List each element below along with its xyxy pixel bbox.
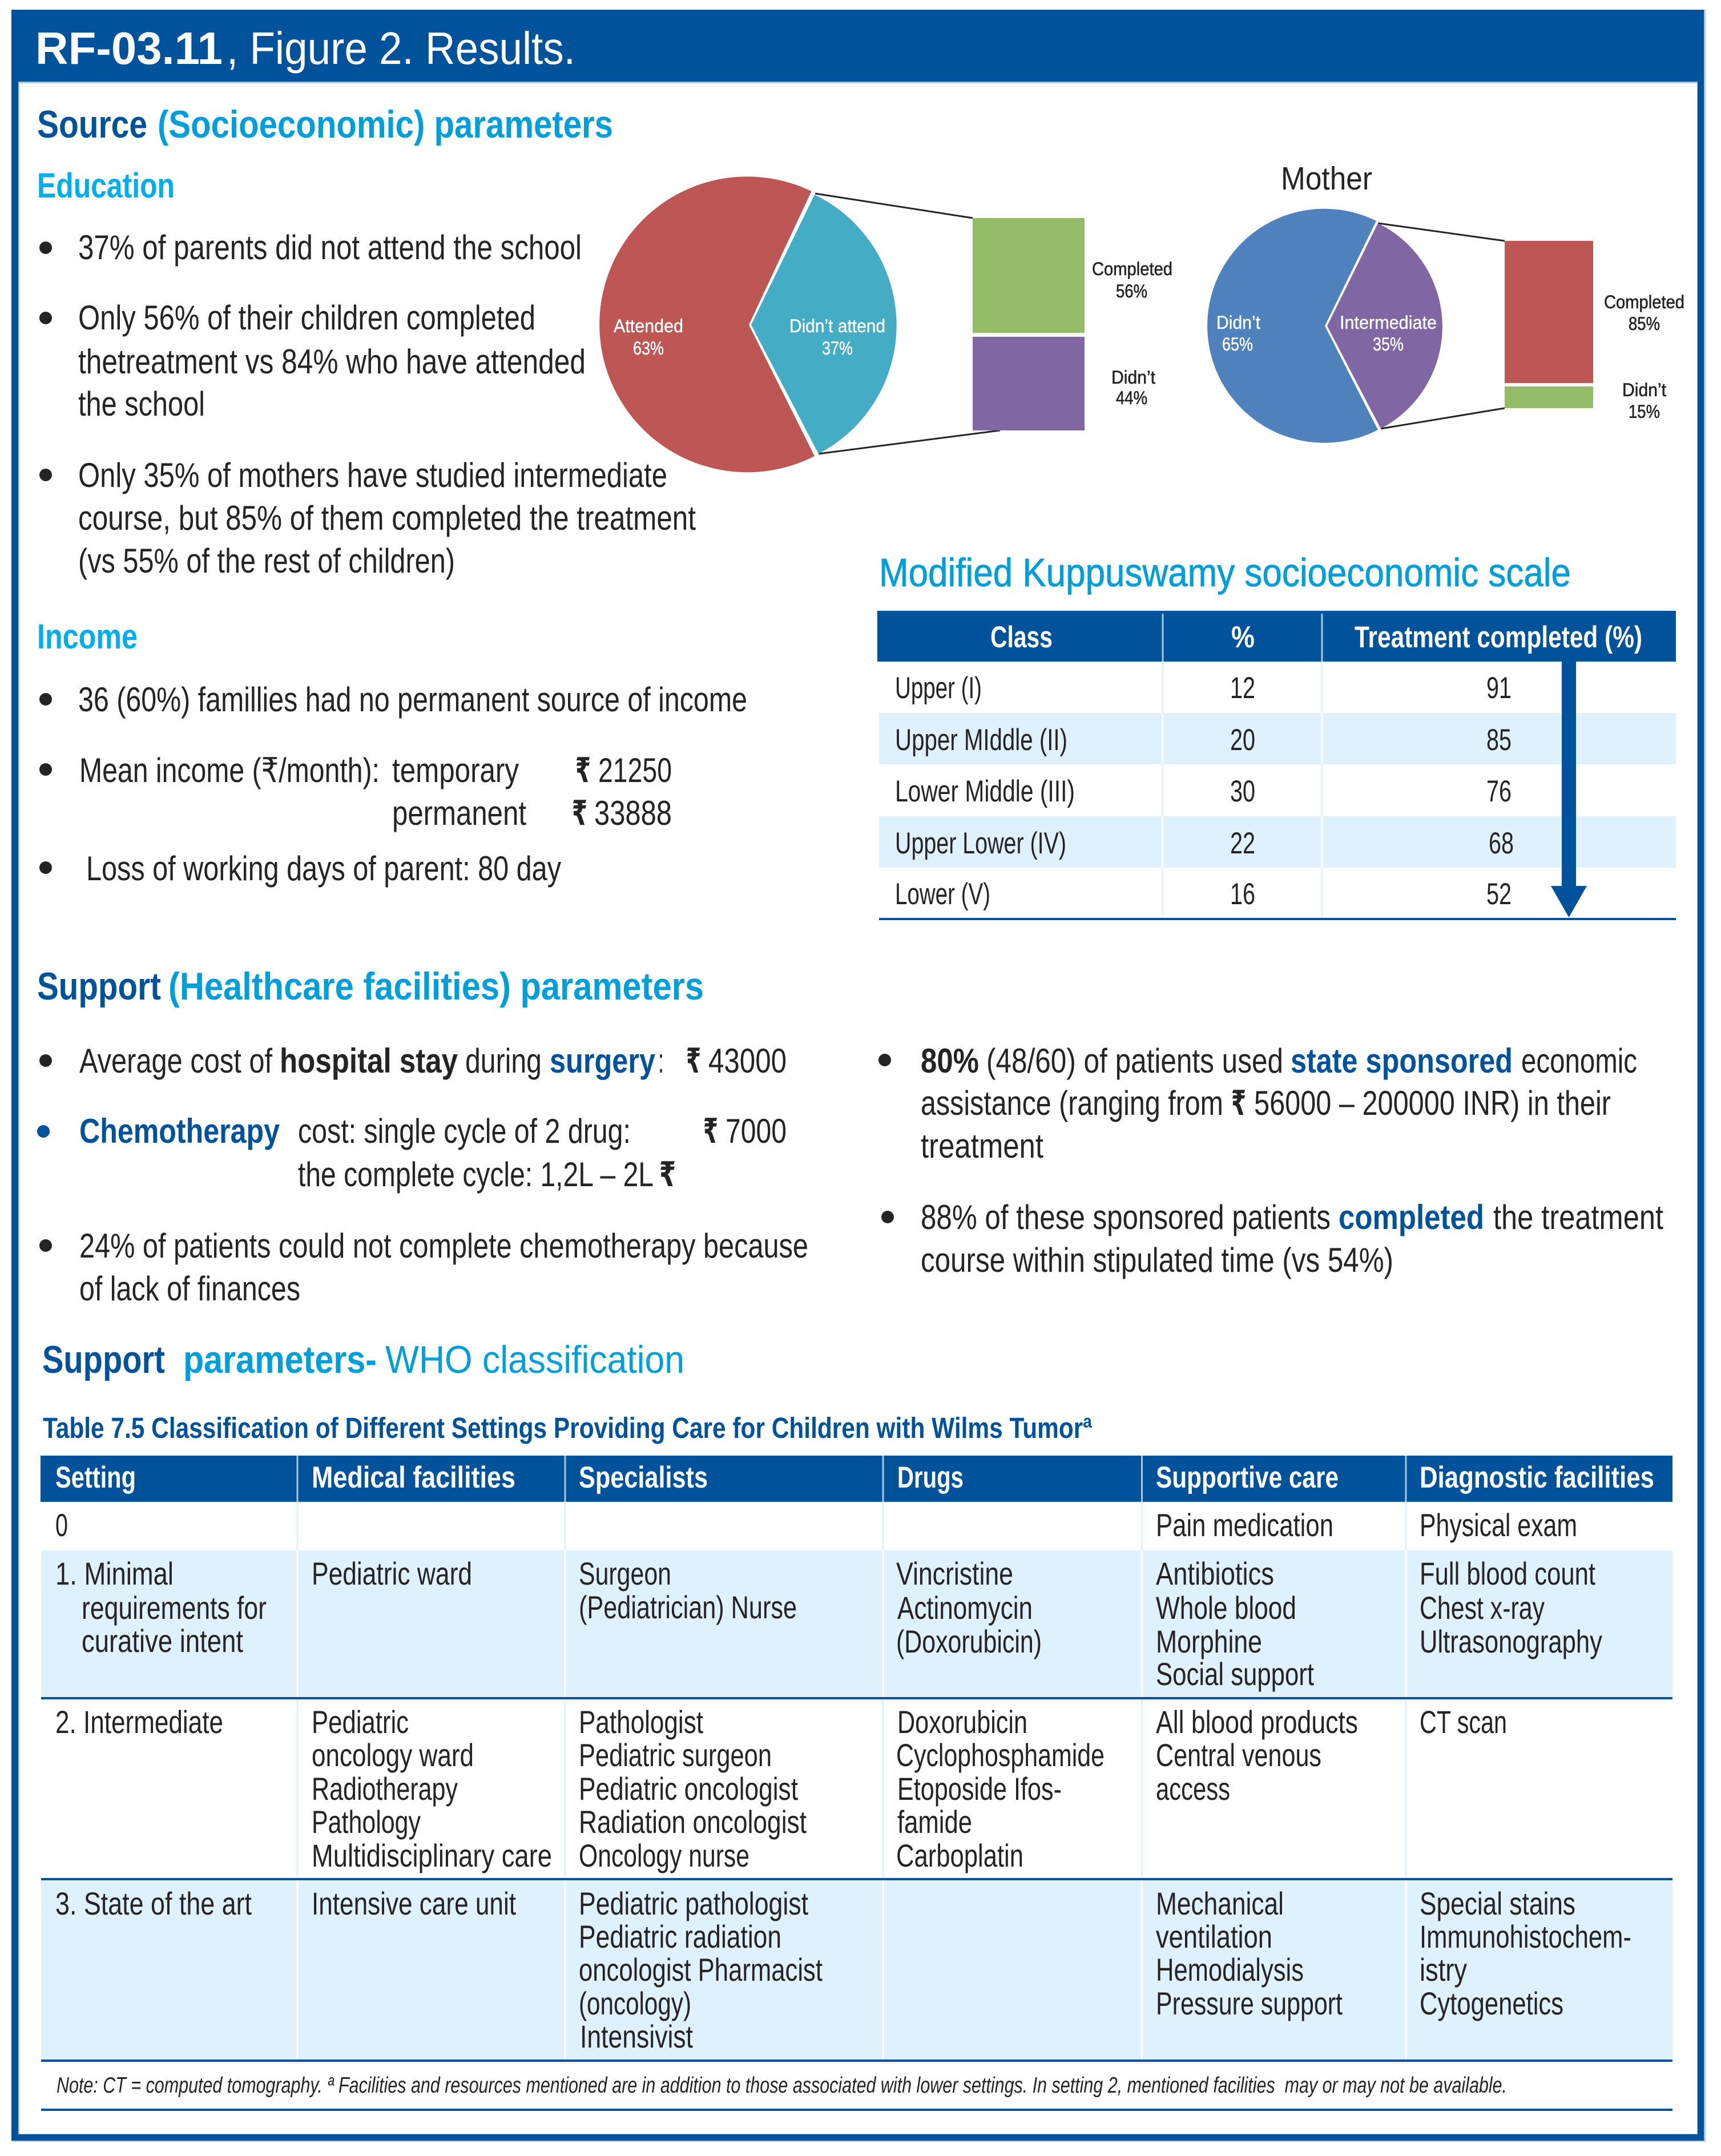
row: setting 2 intermediate: Oncology nurse <box>579 1837 749 1873</box>
support bullets: right column: treatment <box>921 1127 1043 1165</box>
heading: income: Income <box>37 617 138 656</box>
support bullets: right column: the treatment <box>1493 1198 1663 1236</box>
row: setting 3 state of the art: Immunohistochem- <box>1420 1919 1631 1954</box>
support bullets: left column: the complete cycle: 1,2L – 2L <box>298 1155 654 1194</box>
table: Kuppuswamy scale: 20 <box>1230 723 1255 757</box>
income bullets: permanent <box>392 794 526 832</box>
row: setting 2 intermediate: Pediatric oncologist <box>579 1771 798 1807</box>
row: setting 1 minimal: Chest x-ray <box>1420 1590 1545 1626</box>
table: Kuppuswamy scale: Class <box>990 620 1053 654</box>
education bullets <box>39 228 696 580</box>
title <box>35 23 575 74</box>
table: Kuppuswamy scale: 76 <box>1486 775 1512 808</box>
education bullets: the school <box>78 385 205 423</box>
row: setting 1 minimal: 1. Minimal <box>55 1555 174 1591</box>
row: setting 0 <box>55 1507 1577 1543</box>
row: setting 3 state of the art: 3. State of the art <box>55 1885 252 1921</box>
income bullets: ₹ <box>575 751 591 789</box>
row: setting 3 state of the art: Mechanical <box>1156 1885 1284 1921</box>
table: Kuppuswamy scale: 68 <box>1489 827 1514 860</box>
row: setting 2 intermediate: 2. Intermediate <box>55 1704 223 1740</box>
row: setting 1 minimal: curative intent <box>82 1623 243 1659</box>
pie chart: parents education: 56% <box>1116 281 1147 301</box>
row: setting 2 intermediate: Pediatric <box>312 1704 409 1740</box>
table: Kuppuswamy scale: Lower (V) <box>895 877 990 911</box>
row: setting 1 minimal: Pediatric ward <box>312 1555 472 1591</box>
row: setting 3 state of the art: Intensivist <box>580 2018 693 2054</box>
heading: WHO classification: WHO classification <box>385 1338 684 1381</box>
row: setting 1 minimal: Ultrasonography <box>1420 1623 1602 1659</box>
pie chart: parents education: 37% <box>822 338 853 358</box>
table: Kuppuswamy scale: Upper Lower (IV) <box>895 827 1066 860</box>
row: setting 1 minimal: (Doxorubicin) <box>896 1623 1042 1659</box>
support bullets: left column: 24% of patients could not complete chemotherapy because <box>79 1227 808 1265</box>
row: setting 3 state of the art: istry <box>1420 1952 1467 1988</box>
pie chart: parents education: Didn’t <box>1111 367 1155 388</box>
heading: WHO classification <box>42 1338 684 1381</box>
heading: education: Education <box>37 166 175 205</box>
table: Kuppuswamy scale: 85 <box>1486 723 1512 757</box>
table: Kuppuswamy scale: Upper (I) <box>895 671 982 705</box>
table: Kuppuswamy scale: 16 <box>1230 877 1255 911</box>
row: setting 1 minimal: Actinomycin <box>897 1590 1033 1626</box>
support bullets: left column: during <box>465 1042 542 1080</box>
row: setting 2 intermediate: Doxorubicin <box>897 1704 1027 1740</box>
support bullets: left column: hospital stay <box>280 1042 458 1080</box>
table: Kuppuswamy scale: 30 <box>1230 775 1255 808</box>
table header row: Specialists <box>579 1461 708 1494</box>
pie chart: parents education: 63% <box>633 338 664 358</box>
support bullets: right column: 56000 – 200000 INR) in their <box>1254 1084 1611 1122</box>
table: Kuppuswamy scale: Upper MIddle (II) <box>895 723 1067 757</box>
row: setting 1 minimal: Social support <box>1156 1656 1314 1692</box>
support bullets: right column <box>878 1042 1663 1279</box>
pie chart: parents education: Attended <box>614 316 683 336</box>
heading: support parameters: (Healthcare facilities) parameters <box>168 965 704 1008</box>
title: RF-03.11 <box>35 23 223 74</box>
pie chart: mother: 65% <box>1222 334 1253 354</box>
row: setting 2 intermediate: Multidisciplinary care <box>312 1837 552 1873</box>
row: setting 3 state of the art: oncologist Pharmacist <box>579 1952 823 1988</box>
row: setting 3 state of the art: Pediatric radiation <box>579 1919 781 1954</box>
table: Kuppuswamy scale: Lower Middle (III) <box>895 775 1075 808</box>
row: setting 2 intermediate: Pathologist <box>579 1704 703 1740</box>
pie chart: mother: Mother <box>1281 160 1372 197</box>
support bullets: right column: (48/60) of patients used <box>986 1042 1283 1080</box>
row: setting 3 state of the art: Intensive care unit <box>312 1885 516 1921</box>
support bullets: left column: of lack of finances <box>79 1270 300 1308</box>
table header row: Setting <box>55 1461 136 1494</box>
table: Kuppuswamy scale: Treatment completed (%) <box>1355 620 1642 654</box>
row: setting 1 minimal: Whole blood <box>1156 1590 1296 1626</box>
table header row <box>55 1461 1654 1494</box>
support bullets: left column: Average cost of <box>79 1042 272 1080</box>
table: Kuppuswamy scale: 91 <box>1486 671 1512 705</box>
row: setting 3 state of the art: Special stains <box>1420 1885 1575 1921</box>
table: Kuppuswamy scale <box>877 611 1676 920</box>
heading: WHO classification: Support <box>42 1338 165 1381</box>
table title: Table 7.5 Classification of Different Settings Providing Care for Children with Wilms Tumorª <box>43 1412 1092 1444</box>
heading: support parameters: Support <box>37 965 161 1008</box>
title: , Figure 2. Results. <box>227 23 575 74</box>
row: setting 0: 0 <box>55 1507 68 1543</box>
support bullets: left column: ₹ <box>659 1155 676 1194</box>
income bullets <box>39 680 747 888</box>
income bullets: ₹ <box>572 794 587 832</box>
row: setting 3 state of the art: Cytogenetics <box>1420 1985 1563 2021</box>
heading: source parameters: Source <box>37 103 147 146</box>
row: setting 2 intermediate: CT scan <box>1420 1704 1507 1740</box>
row: setting 2 intermediate: Cyclophosphamide <box>896 1737 1105 1773</box>
education bullets: (vs 55% of the rest of children) <box>78 542 455 580</box>
pie chart: mother: 35% <box>1373 334 1404 354</box>
pie chart: mother <box>1207 160 1684 443</box>
support bullets: left column <box>37 1042 808 1308</box>
row: setting 1 minimal: Vincristine <box>896 1555 1013 1591</box>
row: setting 2 intermediate: Pediatric surgeon <box>579 1737 772 1773</box>
row: setting 1 minimal: Morphine <box>1156 1623 1262 1659</box>
row: setting 1 minimal <box>55 1555 1602 1692</box>
income bullets: Loss of working days of parent: 80 day <box>86 849 561 888</box>
education bullets: Only 35% of mothers have studied intermediate <box>78 456 667 494</box>
support bullets: left column: Chemotherapy <box>79 1112 280 1150</box>
pie chart: mother: Didn’t <box>1622 380 1666 400</box>
education bullets: thetreatment vs 84% who have attended <box>78 342 586 381</box>
support bullets: right column: economic <box>1521 1042 1637 1080</box>
pie chart: mother: Intermediate <box>1340 312 1437 333</box>
pie chart: parents education: Completed <box>1092 259 1172 279</box>
row: setting 1 minimal: Surgeon <box>579 1555 671 1591</box>
row: setting 2 intermediate: Carboplatin <box>896 1837 1023 1873</box>
row: setting 1 minimal: Full blood count <box>1420 1555 1595 1591</box>
support bullets: left column: ₹ <box>703 1112 718 1150</box>
row: setting 3 state of the art: ventilation <box>1156 1919 1272 1954</box>
row: setting 2 intermediate: All blood products <box>1156 1704 1358 1740</box>
pie chart: mother: 85% <box>1629 313 1660 334</box>
row: setting 2 intermediate: Etoposide Ifos- <box>897 1771 1062 1807</box>
heading: WHO classification: parameters- <box>183 1338 377 1381</box>
table: Kuppuswamy scale: 12 <box>1230 671 1255 705</box>
support bullets: left column: 7000 <box>726 1112 787 1150</box>
support bullets: left column: surgery <box>550 1042 656 1080</box>
table header row: Supportive care <box>1156 1461 1339 1494</box>
pie chart: parents education <box>599 176 1172 472</box>
support bullets: right column: 80% <box>921 1042 979 1080</box>
row: setting 0: Pain medication <box>1156 1507 1333 1543</box>
row: setting 2 intermediate: famide <box>897 1804 972 1840</box>
row: setting 3 state of the art <box>55 1885 1631 2054</box>
education bullets: Only 56% of their children completed <box>78 299 535 337</box>
heading: source parameters <box>37 103 613 146</box>
row: setting 2 intermediate: oncology ward <box>312 1737 474 1773</box>
income bullets: 33888 <box>594 794 672 832</box>
table header row: Drugs <box>897 1461 964 1494</box>
support bullets: left column: ₹ <box>686 1042 701 1080</box>
row: setting 1 minimal: Antibiotics <box>1156 1555 1274 1591</box>
support bullets: right column: 88% of these sponsored patients <box>921 1198 1331 1236</box>
income bullets: Mean income (₹/month): <box>79 751 380 789</box>
education bullets: course, but 85% of them completed the treatment <box>78 499 696 537</box>
row: setting 2 intermediate: Radiation oncologist <box>579 1804 807 1840</box>
row: setting 2 intermediate: Radiotherapy <box>312 1771 458 1807</box>
table: Kuppuswamy scale: 22 <box>1230 827 1255 860</box>
arrow: decreasing completion <box>1551 662 1587 917</box>
education bullets: 37% of parents did not attend the school <box>78 228 582 267</box>
row: setting 0: Physical exam <box>1420 1507 1577 1543</box>
pie chart: parents education: Didn’t attend <box>789 316 885 336</box>
row: setting 2 intermediate: Pathology <box>312 1804 421 1840</box>
support bullets: right column: completed <box>1339 1198 1484 1236</box>
table header row: Medical facilities <box>312 1461 515 1494</box>
row: setting 3 state of the art: Pediatric pathologist <box>579 1885 808 1921</box>
row: setting 3 state of the art: Pressure support <box>1156 1985 1343 2021</box>
table: WHO settings <box>41 1456 1672 2111</box>
support bullets: left column: cost: single cycle of 2 drug: <box>298 1112 631 1150</box>
pie chart: mother: 15% <box>1629 401 1660 422</box>
income bullets: 21250 <box>598 751 672 789</box>
support bullets: left column: 43000 <box>708 1042 787 1080</box>
row: setting 1 minimal: (Pediatrician) Nurse <box>579 1589 797 1625</box>
row: setting 2 intermediate: access <box>1156 1771 1230 1807</box>
table: Kuppuswamy scale: % <box>1231 620 1255 654</box>
heading: source parameters: (Socioeconomic) parameters <box>158 103 613 146</box>
support bullets: right column: state sponsored <box>1291 1042 1513 1080</box>
support bullets: right column: assistance (ranging from <box>921 1084 1223 1122</box>
heading: Kuppuswamy scale: Modified Kuppuswamy socioeconomic scale <box>879 550 1571 595</box>
support bullets: left column: : <box>658 1042 664 1080</box>
income bullets: temporary <box>392 751 519 789</box>
table header row: Diagnostic facilities <box>1420 1461 1654 1494</box>
row: setting 3 state of the art: Hemodialysis <box>1156 1952 1304 1988</box>
pie chart: mother: Didn’t <box>1216 312 1260 333</box>
pie chart: parents education: 44% <box>1116 388 1147 408</box>
row: setting 3 state of the art: (oncology) <box>579 1985 691 2021</box>
row: setting 2 intermediate <box>55 1704 1507 1873</box>
income bullets: 36 (60%) famillies had no permanent source of income <box>78 680 747 719</box>
table: Kuppuswamy scale: 52 <box>1486 877 1512 911</box>
support bullets: right column: ₹ <box>1231 1084 1246 1122</box>
support bullets: right column: course within stipulated time (vs 54%) <box>921 1241 1393 1279</box>
row: setting 2 intermediate: Central venous <box>1156 1737 1321 1773</box>
pie chart: mother: Completed <box>1604 292 1684 312</box>
row: setting 1 minimal: requirements for <box>82 1590 267 1626</box>
